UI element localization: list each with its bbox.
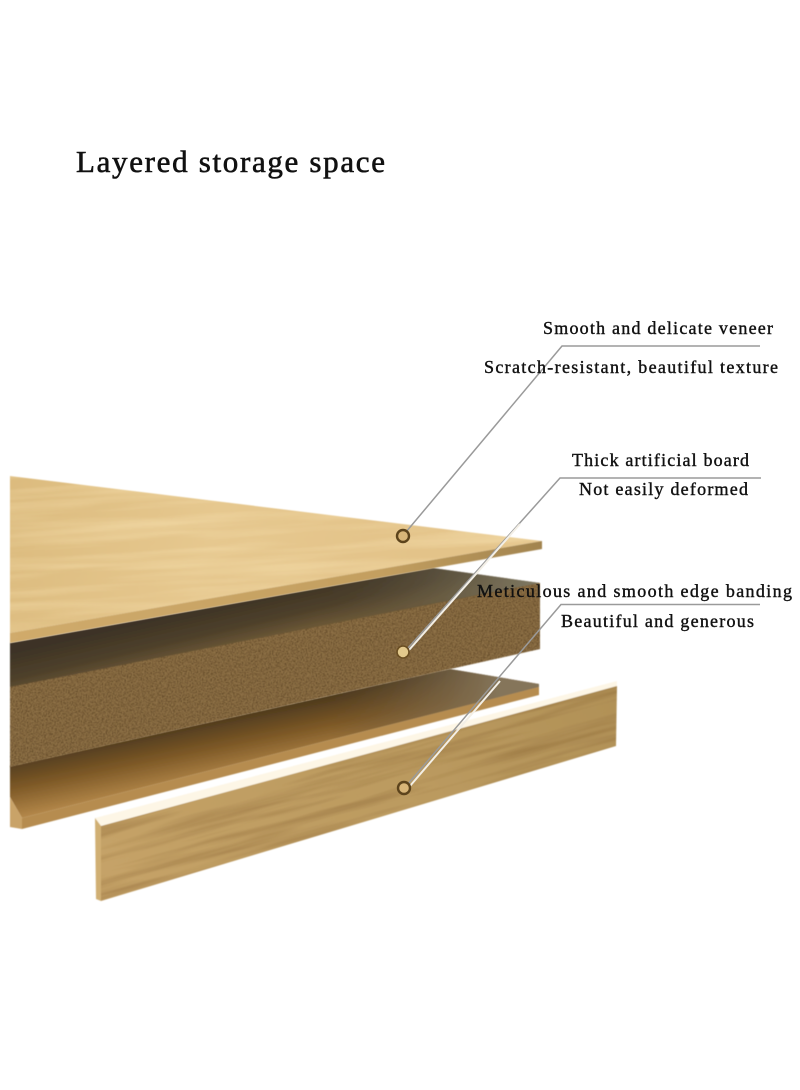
label: heading: Smooth and delicate veneer xyxy=(543,318,773,338)
callout: edge banding xyxy=(398,581,792,794)
title: Layered storage space xyxy=(76,144,385,179)
callout: artificial board xyxy=(397,450,761,658)
leader line xyxy=(408,478,761,650)
icon: marker dot xyxy=(397,646,409,658)
label: heading: Thick artificial board xyxy=(572,450,749,470)
layer: lower board xyxy=(10,669,539,829)
leader line xyxy=(408,604,760,786)
layer: thick artificial board xyxy=(10,568,540,767)
leader line xyxy=(406,346,760,532)
infographic canvas xyxy=(9,150,792,902)
layer: edge banding strip xyxy=(94,681,618,902)
label: detail: Not easily deformed xyxy=(579,479,748,499)
label: heading: Meticulous and smooth edge banding xyxy=(477,581,792,601)
icon: marker dot xyxy=(397,530,409,542)
label: detail: Scratch-resistant, beautiful texture xyxy=(484,357,778,377)
label: detail: Beautiful and generous xyxy=(561,611,754,631)
layer: veneer top board xyxy=(9,476,543,644)
product: exploded board layers xyxy=(9,476,618,902)
callout: veneer xyxy=(397,318,778,542)
icon: marker dot xyxy=(398,782,410,794)
